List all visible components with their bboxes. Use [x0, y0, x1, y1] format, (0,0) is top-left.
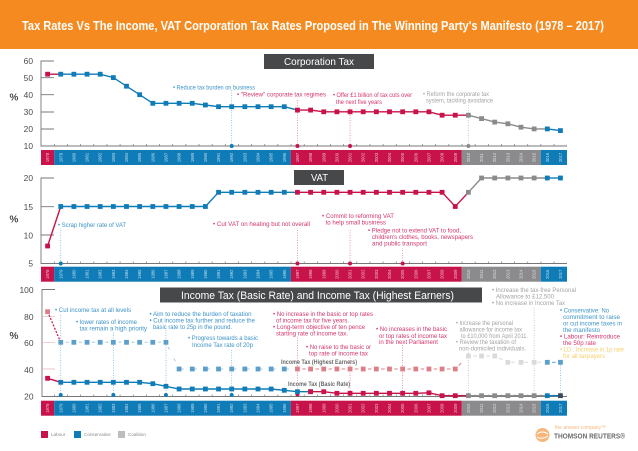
year strip: corporation tax: 1995 — [269, 152, 274, 162]
year strip: VAT: 1980 — [71, 269, 76, 279]
year strip: income tax: 2008 — [440, 403, 445, 413]
year strip: income tax: 1999 — [321, 403, 326, 413]
annotation: 2017 party pledges: the manifesto — [563, 327, 600, 334]
year strip: VAT: 2010 — [466, 269, 471, 279]
year strip: income tax: 2006 — [413, 403, 418, 413]
year strip: corporation tax: 2009 — [453, 152, 458, 162]
year strip: corporation tax: 2003 — [374, 152, 379, 162]
annotation: 2017 party pledges: the 50p rate — [563, 340, 596, 347]
axis: corporation tax: 50 — [24, 73, 33, 83]
year strip: income tax: 2012 — [492, 403, 497, 413]
year strip: VAT: 1993 — [242, 269, 247, 279]
year strip: income tax: 2010 — [466, 403, 471, 413]
year strip: corporation tax: 1991 — [216, 152, 221, 162]
annotation: pledge not to extend VAT: and public transport — [372, 241, 427, 248]
legend: Conservative — [84, 432, 111, 437]
axis: corporation tax: 60 — [24, 56, 33, 66]
annotation: no increase basic or top rates: • No increase in the basic or top rates — [273, 311, 373, 318]
year strip: income tax: 1984 — [124, 403, 129, 413]
year strip: VAT: 1996 — [282, 269, 287, 279]
year strip: VAT: 2016 — [545, 269, 550, 279]
annotation: lower rates: tax remain a high priority — [80, 326, 148, 333]
year strip: corporation tax: 1996 — [282, 152, 287, 162]
annotation: cut income tax: • Cut income tax at all levels — [55, 307, 131, 314]
year strip: VAT: 1987 — [163, 269, 168, 279]
panel: corporation tax — [10, 54, 567, 165]
year strip: corporation tax: 2013 — [505, 152, 510, 162]
annotation: tax-free allowance — [492, 287, 576, 307]
annotation: progress to 20p: Income Tax rate of 20p — [192, 342, 253, 349]
year strip: corporation tax: 1980 — [71, 152, 76, 162]
axis: VAT — [10, 173, 567, 268]
annotation: cut VAT on heating: • Cut VAT on heating but not overall — [213, 221, 310, 228]
year strip: income tax: 1987 — [163, 403, 168, 413]
annotation: no increase basic or top rates: • Long-term objective of ten pence — [273, 324, 365, 331]
annotation: increase personal allowance: allowance for income tax — [460, 327, 523, 334]
year strip: corporation tax: 1982 — [98, 152, 103, 162]
annotation: scrap higher rate: • Scrap higher rate of VAT — [58, 222, 126, 229]
year strip: corporation tax: 2011 — [479, 152, 484, 162]
axis: VAT: 15 — [24, 202, 33, 212]
annotation: aim to reduce burden: • Cut income tax further and reduce the — [150, 318, 255, 325]
year strip: income tax: 2009 — [453, 403, 458, 413]
series label: highest earners: Income Tax (Highest Earners) — [281, 360, 357, 366]
year strip: corporation tax: 2016 — [545, 152, 550, 162]
annotation: no raise — [306, 344, 371, 358]
year strip: corporation tax: 2000 — [334, 152, 339, 162]
year strip: VAT: 1978 — [45, 269, 50, 279]
year strip: income tax: 1981 — [85, 403, 90, 413]
year strip: corporation tax: 1989 — [190, 152, 195, 162]
line chart: VAT rate — [48, 178, 560, 246]
year strip: VAT: 2013 — [505, 269, 510, 279]
logo: Thomson Reuters — [536, 425, 626, 442]
annotation: increase personal allowance — [456, 320, 528, 353]
year strip: corporation tax: 2014 — [518, 152, 524, 162]
markers: manifesto drop lines — [59, 228, 405, 266]
year strip: VAT: 2003 — [374, 269, 379, 279]
annotation: pledge not to extend VAT: children's clothes, books, newspapers — [372, 234, 473, 241]
annotation: aim to reduce burden — [150, 311, 255, 331]
year strip: corporation tax: 1998 — [308, 152, 313, 162]
axis: VAT: 20 — [24, 173, 33, 183]
annotation: offer tax cuts: • Offer £1 billion of tax cuts over — [333, 92, 412, 99]
panel: income tax — [10, 285, 624, 416]
year strip: corporation tax — [41, 150, 567, 165]
year strip: VAT — [41, 267, 567, 282]
annotation: offer tax cuts — [333, 92, 412, 106]
axis: corporation tax — [10, 56, 567, 151]
year strip: income tax: 1988 — [177, 403, 182, 413]
annotation: no increase basic or top rates: of income tax for five years. — [276, 317, 349, 324]
year strip: VAT: 1985 — [137, 269, 142, 279]
year strip: income tax: 1994 — [256, 403, 260, 413]
year strip: VAT: 1983 — [111, 269, 116, 279]
year strip: corporation tax: 1981 — [85, 152, 90, 162]
annotation: reform corporate tax — [423, 91, 493, 105]
markers: manifesto drop lines — [230, 90, 470, 148]
year strip: corporation tax: 1988 — [177, 152, 182, 162]
annotation: progress to 20p — [188, 335, 258, 349]
panel: VAT — [10, 170, 567, 282]
year strip: corporation tax: 2006 — [413, 152, 418, 162]
annotation: tax-free allowance: • Increase the tax-free Personal — [492, 287, 576, 294]
year strip: income tax: 2017 — [558, 403, 563, 413]
year strip: corporation tax: 2008 — [440, 152, 445, 162]
year strip: income tax: 1989 — [190, 403, 195, 413]
annotation: commit to reforming VAT — [322, 213, 394, 227]
year strip: VAT: 2005 — [400, 269, 405, 279]
year strip: corporation tax: 2010 — [466, 152, 471, 162]
year strip: corporation tax: 2015 — [532, 152, 537, 162]
year strip: income tax: 2013 — [505, 403, 510, 413]
year strip: VAT: 2000 — [334, 269, 339, 279]
year strip: income tax: 2001 — [348, 403, 353, 413]
year strip: VAT: 2017 — [558, 269, 563, 279]
year strip: VAT: 2015 — [532, 269, 537, 279]
year strip: income tax: 1983 — [111, 403, 116, 413]
year strip: income tax: 2007 — [426, 403, 431, 413]
logo: Thomson Reuters: THOMSON REUTERS® — [554, 432, 626, 440]
line chart: income tax highest earners — [48, 312, 560, 369]
year strip: VAT: 2012 — [492, 269, 497, 279]
year strip: corporation tax: 1993 — [242, 152, 247, 162]
year strip: income tax: 1980 — [71, 403, 76, 413]
year strip: VAT: 1995 — [269, 269, 274, 279]
logo: Thomson Reuters: the answer company™ — [555, 425, 606, 431]
year strip: VAT: 1986 — [150, 269, 155, 279]
axis: corporation tax: 40 — [24, 90, 33, 100]
year strip: income tax: 1993 — [242, 403, 247, 413]
annotation: increase personal allowance: non-domiciled individuals. — [459, 346, 526, 353]
year strip: income tax: 2004 — [387, 403, 392, 413]
year strip: VAT: 2002 — [361, 269, 366, 279]
year strip: VAT: 2006 — [413, 269, 418, 279]
annotation: no raise: top rate of income tax — [309, 351, 369, 358]
annotation: no increase basic or top rates: starting rate of income tax. — [276, 330, 348, 337]
annotation: increase personal allowance: • Increase the personal — [456, 320, 513, 327]
line chart: corporation tax rate — [48, 74, 560, 131]
year strip: VAT: 1988 — [177, 269, 182, 279]
annotation: no increases next parliament: or top rates of income tax — [379, 333, 448, 340]
year strip: corporation tax: 1985 — [137, 152, 142, 162]
annotation: increase personal allowance: to £10,000 from April 2011. — [461, 333, 528, 340]
axis: VAT: 10 — [24, 230, 33, 240]
annotation: tax-free allowance: Allowance to £12,500 — [496, 294, 554, 301]
year strip: VAT: 1979 — [58, 269, 63, 279]
year strip: income tax: 2016 — [545, 403, 550, 413]
axis: VAT: 5 — [28, 258, 33, 268]
year strip: corporation tax: 1999 — [321, 152, 326, 162]
year strip: income tax: 1997 — [295, 403, 300, 413]
annotation: offer tax cuts: the next five years — [336, 99, 382, 106]
year strip: corporation tax: 1987 — [163, 152, 168, 162]
annotation: tax-free allowance: • No increase in Income Tax — [492, 300, 566, 307]
year strip: income tax: 2002 — [361, 403, 366, 413]
year strip: income tax: 1991 — [216, 403, 221, 413]
year strip: VAT: 2011 — [479, 269, 484, 279]
annotation: reform corporate tax: • Reform the corporate tax — [423, 91, 490, 98]
axis: income tax: 100 — [20, 285, 34, 295]
year strip: VAT: 1990 — [203, 269, 208, 279]
axis: corporation tax: 20 — [24, 124, 33, 134]
annotation: aim to reduce burden: • Aim to reduce the burden of taxation — [150, 311, 252, 318]
line chart: income tax basic rate — [48, 378, 563, 398]
year strip: corporation tax: 1984 — [124, 152, 129, 162]
axis: income tax: 40 — [24, 365, 34, 375]
axis: corporation tax: 30 — [24, 107, 33, 117]
series label: basic rate: Income Tax (Basic Rate) — [288, 382, 350, 388]
annotation: aim to reduce burden: basic rate to 25p in the pound. — [153, 324, 232, 331]
year strip: income tax — [41, 401, 567, 416]
year strip: income tax: 1978 — [45, 403, 50, 413]
year strip: income tax: 2003 — [374, 403, 379, 413]
year strip: corporation tax: 2005 — [400, 152, 405, 162]
annotation: increase personal allowance: • Review the taxation of — [456, 339, 516, 346]
annotation: no increases next parliament — [376, 326, 448, 346]
year strip: income tax: 2011 — [479, 403, 484, 413]
year strip: income tax: 2014 — [518, 403, 524, 413]
year strip: income tax: 1998 — [308, 403, 313, 413]
year strip: income tax: 1995 — [269, 403, 274, 413]
heading: VAT: VAT — [311, 172, 329, 184]
markers: manifesto drop lines — [59, 306, 560, 397]
year strip: VAT: 1984 — [124, 269, 129, 279]
axis: income tax: % — [10, 331, 18, 342]
annotation: pledge not to extend VAT: • Pledge not to extend VAT to food, — [368, 228, 461, 235]
legend — [41, 431, 146, 438]
axis: VAT: % — [10, 214, 18, 226]
year strip: corporation tax: 2007 — [426, 152, 431, 162]
annotation: 2017 party pledges: • Labour: Reintroduce — [560, 334, 620, 341]
year strip: corporation tax: 2002 — [361, 152, 366, 162]
year strip: VAT: 2009 — [453, 269, 458, 279]
year strip: income tax: 1996 — [282, 403, 287, 413]
year strip: VAT: 1994 — [256, 269, 260, 279]
annotation: lower rates: • lower rates of income — [76, 319, 137, 326]
year strip: corporation tax: 1986 — [150, 152, 155, 162]
year strip: corporation tax: 1979 — [58, 152, 63, 162]
annotation: commit to reforming VAT: to help small business — [326, 220, 386, 227]
annotation: 2017 party pledges: or cut income taxes in — [563, 321, 622, 328]
year strip: income tax: 1986 — [150, 403, 155, 413]
year strip: corporation tax: 1997 — [295, 152, 300, 162]
year strip: VAT: 1997 — [295, 269, 300, 279]
annotation: no increase basic or top rates — [273, 311, 373, 337]
annotation: reduce tax burden: • Reduce tax burden on business — [173, 84, 255, 91]
annotation: 2017 party pledges: • Conservative: No — [560, 308, 609, 315]
annotation: pledge not to extend VAT — [368, 228, 473, 248]
year strip: income tax: 1990 — [203, 403, 208, 413]
year strip: corporation tax: 2001 — [348, 152, 353, 162]
year strip: VAT: 1999 — [321, 269, 326, 279]
year strip: corporation tax: 2004 — [387, 152, 392, 162]
year strip: VAT: 2004 — [387, 269, 392, 279]
annotation: 2017 party pledges — [560, 308, 624, 360]
year strip: VAT: 1998 — [308, 269, 313, 279]
year strip: income tax: 1985 — [137, 403, 142, 413]
annotation: no increases next parliament: in the next Parliament — [379, 339, 438, 346]
year strip: income tax: 1979 — [58, 403, 63, 413]
annotation: progress to 20p: • Progress towards a basic — [188, 335, 258, 342]
year strip: VAT: 2007 — [426, 269, 431, 279]
heading: income tax: Income Tax (Basic Rate) and Income Tax (Highest Earners) — [181, 290, 454, 302]
year strip: VAT: 1981 — [85, 269, 90, 279]
year strip: income tax: 2015 — [532, 403, 537, 413]
annotation: 2017 party pledges: for all taxpayers — [563, 353, 605, 360]
axis: income tax: 20 — [24, 392, 34, 402]
legend: Labour — [51, 432, 66, 437]
annotation: review corporate tax: • "Review" corporate tax regimes — [237, 92, 326, 99]
year strip: VAT: 1991 — [216, 269, 221, 279]
axis: income tax: 60 — [24, 338, 34, 348]
axis: corporation tax: % — [10, 92, 18, 104]
year strip: corporation tax: 1990 — [203, 152, 208, 162]
heading: corporation tax — [264, 54, 374, 69]
heading: corporation tax: Corporation Tax — [284, 56, 355, 68]
axis: corporation tax: 10 — [24, 141, 33, 151]
year strip: VAT: 2001 — [348, 269, 353, 279]
title banner — [0, 0, 638, 49]
axis: income tax — [10, 285, 567, 402]
annotation: no raise: • No raise to the basic or — [306, 344, 371, 351]
year strip: income tax: 1992 — [229, 403, 234, 413]
year strip: corporation tax: 1994 — [256, 152, 260, 162]
year strip: corporation tax: 1992 — [229, 152, 234, 162]
annotation: commit to reforming VAT: • Commit to reforming VAT — [322, 213, 394, 220]
year strip: VAT: 2014 — [518, 269, 524, 279]
annotation: no increases next parliament: • No increases in the basic — [376, 326, 447, 333]
year strip: VAT: 1992 — [229, 269, 234, 279]
annotation: 2017 party pledges: commitment to raise — [563, 314, 621, 321]
year strip: income tax: 2005 — [400, 403, 405, 413]
legend: Coalition — [128, 432, 146, 437]
annotation: lower rates — [76, 319, 148, 333]
year strip: corporation tax: 1983 — [111, 152, 116, 162]
annotation: 2017 party pledges: • LD : Increase in 1p rate — [560, 347, 624, 354]
year strip: VAT: 1982 — [98, 269, 103, 279]
year strip: income tax: 1982 — [98, 403, 103, 413]
heading: VAT — [294, 170, 344, 185]
annotation: reform corporate tax: system, tackling avoidance — [426, 98, 493, 105]
year strip: corporation tax: 1978 — [45, 152, 50, 162]
year strip: corporation tax: 2012 — [492, 152, 497, 162]
year strip: corporation tax: 2017 — [558, 152, 563, 162]
year strip: VAT: 2008 — [440, 269, 445, 279]
year strip: income tax: 2000 — [334, 403, 339, 413]
year strip: VAT: 1989 — [190, 269, 195, 279]
axis: income tax: 80 — [24, 312, 34, 322]
